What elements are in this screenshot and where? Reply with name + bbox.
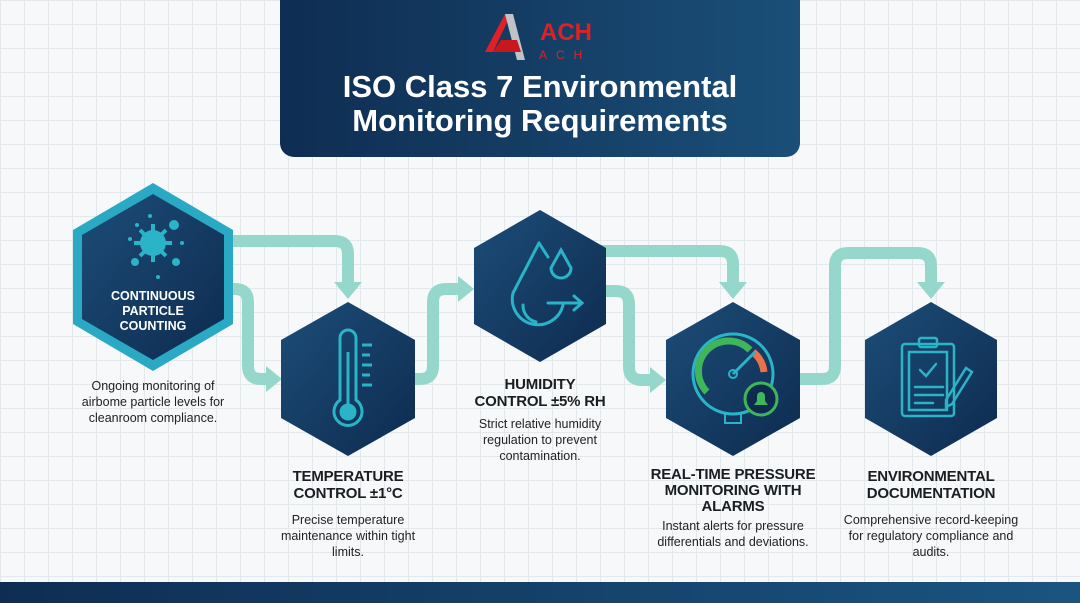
text: temperature: TEMPERATURE (293, 468, 403, 485)
text: temperature (281, 468, 415, 559)
header panel (280, 0, 800, 157)
hex 1: particle counting: COUNTING (120, 319, 186, 333)
footer band (0, 582, 1080, 603)
title: Monitoring Requirements (352, 103, 728, 138)
hex 1: particle counting (73, 183, 233, 371)
title: ISO Class 7 Environmental (343, 69, 737, 104)
text: humidity: Strict relative humidity regulation to prevent contamination. (479, 417, 601, 463)
hex 1: particle counting: PARTICLE (122, 304, 184, 318)
text: humidity: CONTROL ±5% RH (474, 393, 606, 410)
text: documentation: Comprehensive record-keeping (844, 513, 1018, 527)
text: pressure: ALARMS (702, 498, 764, 515)
arrows (225, 241, 931, 380)
text: temperature: Precise temperature maintenance within tight limits. (281, 513, 415, 559)
text: documentation (844, 468, 1018, 559)
text: pressure: MONITORING WITH (665, 482, 801, 499)
text: humidity: HUMIDITY (505, 376, 575, 393)
hex 1: particle counting: CONTINUOUS (111, 289, 195, 303)
text: documentation: audits. (913, 545, 949, 559)
text: documentation: ENVIRONMENTAL (867, 468, 995, 485)
text: documentation: for regulatory compliance and (849, 529, 1013, 543)
hex 2: temperature (281, 302, 415, 456)
text: pressure: REAL-TIME PRESSURE (651, 466, 815, 483)
text: pressure: Instant alerts for pressure differentials and deviations. (657, 519, 809, 549)
logo: ACH (540, 19, 592, 46)
hex 5: documentation (865, 302, 997, 456)
title (343, 69, 737, 138)
hex 4: pressure (666, 302, 800, 456)
logo (485, 14, 592, 62)
logo: ACH (539, 48, 591, 62)
hex 3: humidity (474, 210, 606, 362)
text: temperature: CONTROL ±1°C (293, 485, 403, 502)
text: pressure (651, 466, 816, 549)
text: documentation: DOCUMENTATION (867, 485, 995, 502)
text: humidity (474, 376, 606, 463)
text: particle counting desc: Ongoing monitoring of airbome particle levels for cleanroom compliance. (82, 379, 224, 425)
